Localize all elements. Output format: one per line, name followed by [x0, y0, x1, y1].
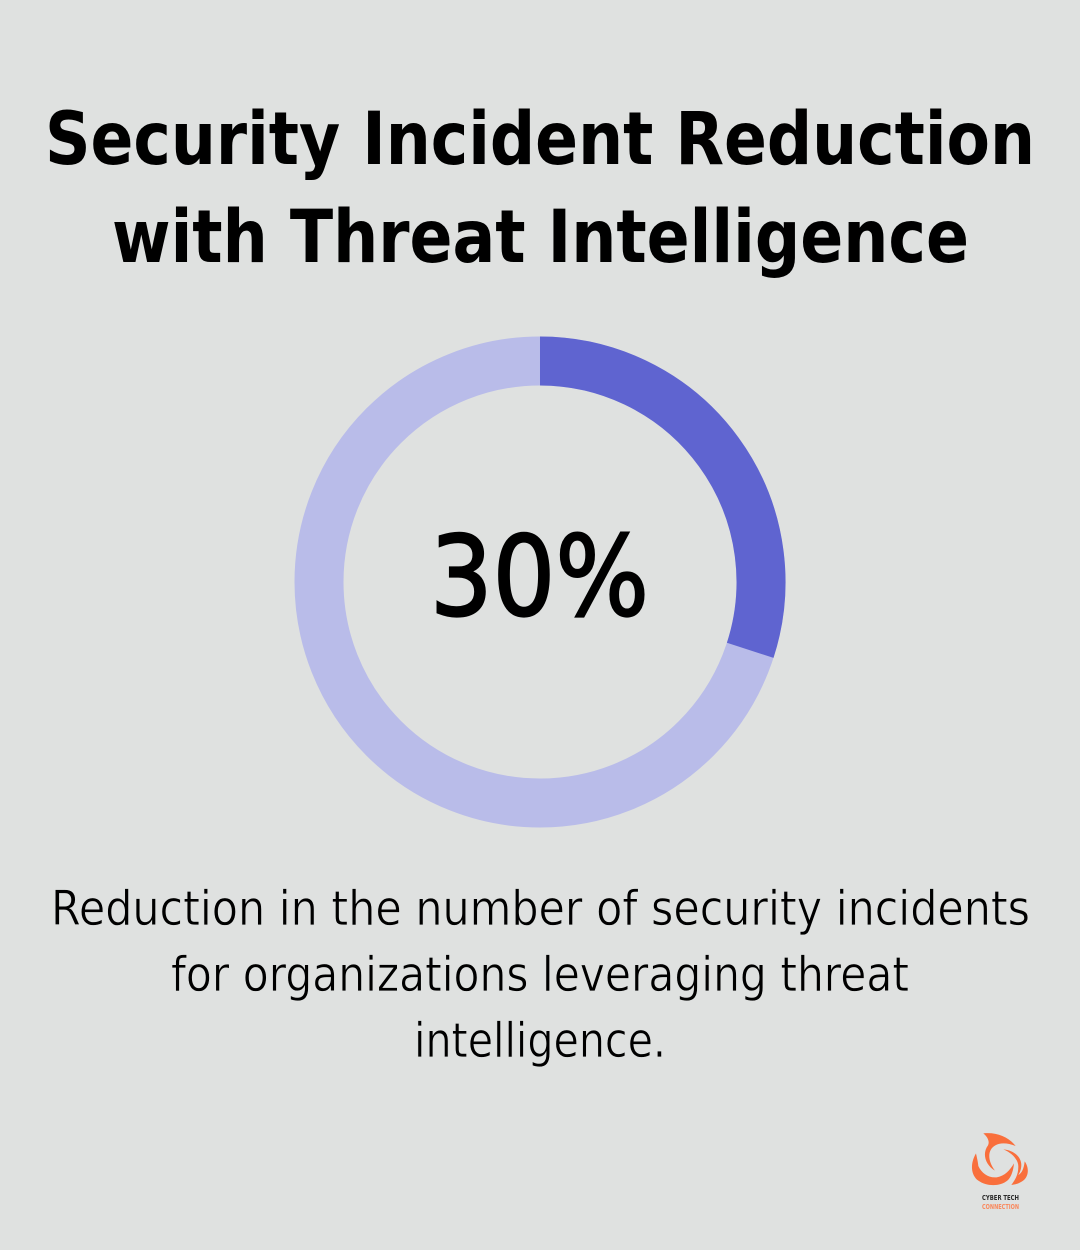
icon: three swooshes [972, 1133, 1028, 1185]
description text: for organizations leveraging threat [171, 947, 909, 1003]
description text [51, 881, 1030, 1069]
title [45, 97, 1035, 280]
description text: intelligence. [414, 1013, 666, 1069]
logo: Cyber Tech Connection: CONNECTION [982, 1203, 1019, 1211]
logo: Cyber Tech Connection [972, 1133, 1028, 1211]
percentage value: 30% [430, 513, 649, 642]
donut chart: 30% [319, 361, 761, 803]
logo wordmark: CYBER TECH [982, 1194, 1019, 1202]
title: with Threat Intelligence [112, 195, 969, 280]
